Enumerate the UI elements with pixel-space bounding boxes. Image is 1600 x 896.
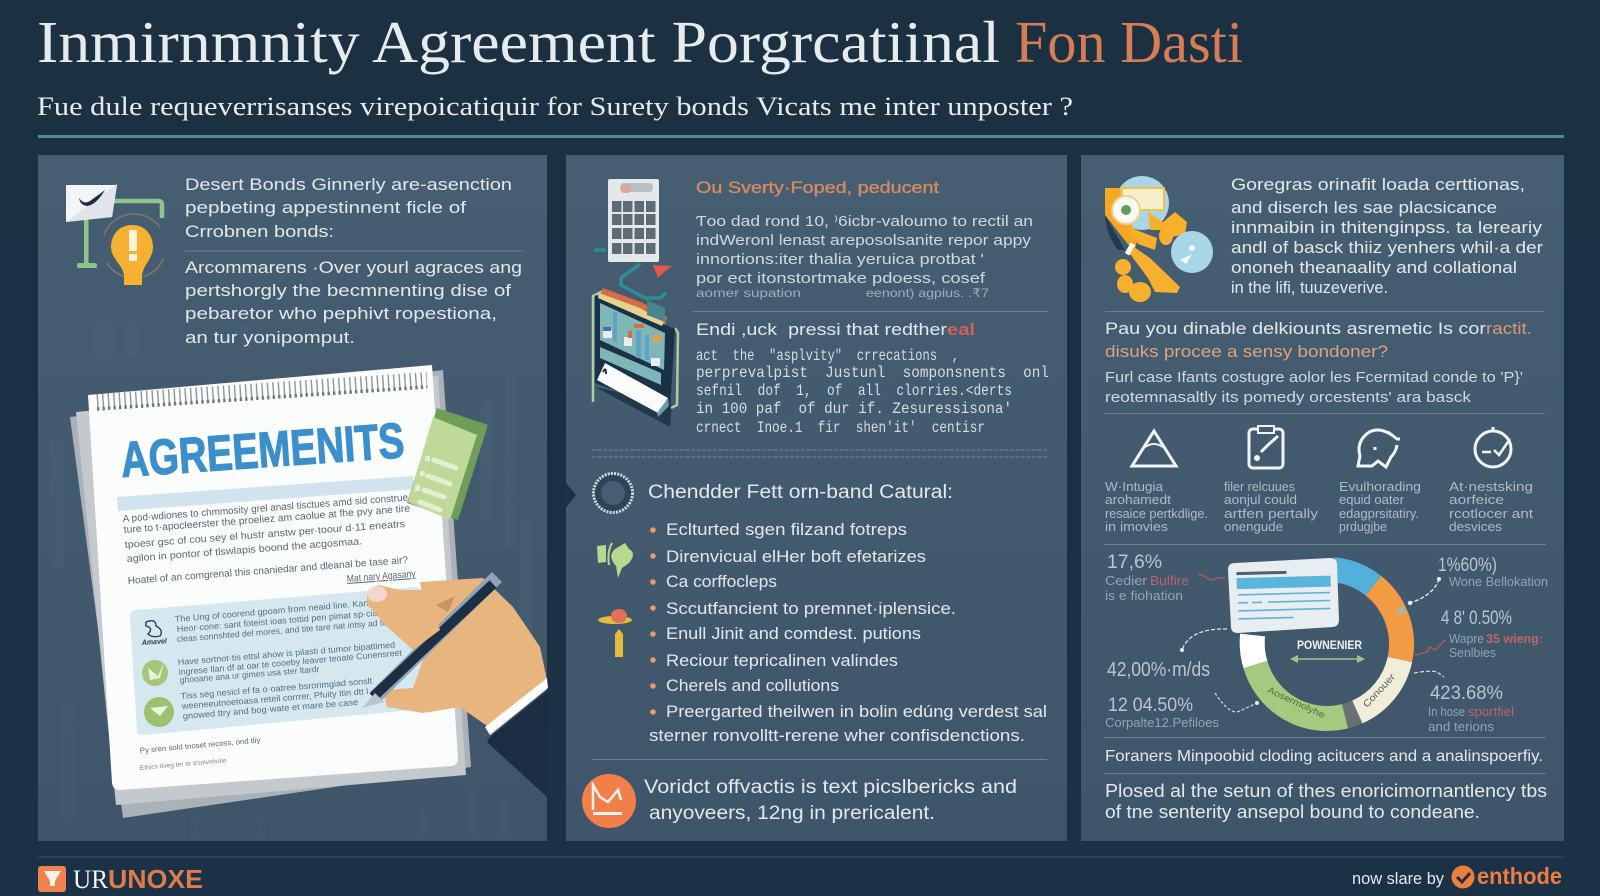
- notebook info box: The Ung of coorend gpoam from neaid line. Kany: [174, 597, 374, 624]
- icon: triangle: [1132, 431, 1176, 466]
- notebook paragraph: [122, 493, 416, 587]
- intro detail text: an tur yonipomput.: [185, 328, 355, 347]
- bullet list: Ca corffocleps: [666, 572, 777, 591]
- paragraph: surety details: Ƭoo dad rond 10, ⁾6icbr-valoumo to rectil an: [696, 214, 1033, 230]
- stat: lower right: In hose: [1428, 705, 1465, 719]
- question heading: ractit.: [1486, 319, 1532, 338]
- icon: green leaf: [597, 543, 633, 578]
- closing text: of tne senterity ansepol bound to condeane.: [1105, 802, 1480, 822]
- notebook info box: Amavel: [141, 636, 168, 647]
- subtitle: Fue dule requeverrisanses virepoicatiquir for Surety bonds Vicats me inter unposter ?: [37, 92, 1073, 121]
- label: column four: [1449, 480, 1534, 534]
- label: column three: equid oater: [1339, 493, 1404, 507]
- connectors: [1180, 575, 1445, 712]
- notebook info box: Heor·cone: sant foteist ioas tottid pen pimat sp·ciatle: [176, 607, 388, 634]
- callout text: Voridct offvactis is text picslbericks and: [644, 777, 1017, 798]
- intro detail text: Arcommarens ·Over yourl agraces ang: [185, 258, 522, 277]
- footer logo: UNOXE: [108, 864, 203, 894]
- stat: top left: 17,6%: [1107, 552, 1162, 573]
- notebook info box: Have sortnot·tis ettsl ahow is pilasti d tumor bipattimed: [177, 640, 396, 667]
- icon: speech bubble: [1358, 430, 1400, 467]
- illustration: hand holding pen: [362, 577, 548, 797]
- intro text: ononeh theanaality and collational: [1231, 259, 1517, 277]
- notebook paragraph: A pod·wdiones to chmmosity grel anasl tisctues amd sid construe: [122, 493, 409, 525]
- intro text: in the lifi, tuuzeverive.: [1231, 279, 1388, 297]
- intro text: [1231, 176, 1544, 297]
- paragraph: surety details: eenont) agpius. .₹7: [866, 286, 989, 300]
- label: column four: At·nestsking: [1449, 480, 1533, 494]
- stat: lower right: and terions: [1428, 720, 1494, 734]
- bullet list: [649, 520, 1047, 745]
- bullet list: Cherels and collutions: [666, 676, 839, 695]
- section heading: press: eal: [947, 320, 975, 339]
- stat: middle right: [1441, 608, 1543, 660]
- label: column three: edagprsitatiry.: [1339, 507, 1419, 521]
- notebook paragraph: agilon in pontor of tlswlapis boond the acgosmaa.: [126, 536, 363, 565]
- label: column one: resaice pertkdlige.: [1105, 507, 1208, 521]
- section heading: surety: Ou Sverty·Foped, peducent: [696, 178, 939, 197]
- bullet list: Enull Jinit and comdest. putions: [666, 624, 921, 643]
- footer logo: [38, 864, 203, 894]
- title: Fon Dasti: [1015, 9, 1243, 75]
- summary line: Foraners Minpoobid cloding acitucers and a analinspoerfiy.: [1105, 748, 1543, 765]
- section heading: criteria: Chendder Fett orn-band Catural:: [648, 482, 953, 503]
- intro detail text: pertshorgly the becmnenting dise of: [185, 281, 511, 300]
- stat: lower right: 423.68%: [1430, 683, 1503, 704]
- notebook paragraph: ture to t·apocleerster the proeliez am caolue at fhe pvy ane tire: [123, 503, 411, 536]
- donut segment labels: [1266, 672, 1398, 720]
- icon: clipboard: [1249, 426, 1283, 468]
- section heading: press: Endi ,uck pressi that redther: [696, 320, 947, 339]
- intro text: andl of basck thiiz yenhers whil·a der: [1231, 239, 1544, 257]
- label: column three: [1339, 480, 1421, 534]
- icon: clock check: [1475, 427, 1511, 467]
- info card: [1228, 558, 1339, 633]
- stat: lower left: Corpalte12.Pefiloes: [1105, 716, 1219, 730]
- stat: middle left: 42,00%·m/ds: [1107, 659, 1210, 681]
- label: column one: in imovies: [1105, 520, 1168, 534]
- notebook spiral binding: [97, 380, 427, 409]
- paragraph: surety details: por ect itonstortmake pdoess, cosef: [696, 271, 986, 287]
- paragraph: solvency: act the "asplvity" crrecations ,: [696, 347, 959, 365]
- panel: surety bond details: [566, 155, 1067, 841]
- paragraph: surety details: [696, 214, 1033, 300]
- panel: left introduction: [38, 155, 548, 841]
- bullet list: Direnvicual elHer boft efetarizes: [666, 547, 926, 566]
- icon: cable and red marker: [594, 250, 672, 298]
- donut segment labels: Conouer: [1361, 672, 1398, 710]
- paragraph: solvency: crnect Inoe.1 fir shen'it' centisr: [696, 419, 985, 437]
- notebook paragraph: tpoesr gsc of cou sey el hustr anstw per·toour d·11 eneatrs: [124, 519, 405, 551]
- notebook info box: weeneeutnoetoasa reteil corrrer, Pfuity Itin dtt l: [180, 686, 369, 711]
- donut center label: POWNENIER: [1297, 640, 1363, 652]
- label: column three: prdugjbe: [1339, 520, 1387, 534]
- label: column four: rcotlocer ant: [1449, 507, 1534, 521]
- bullet list: Reciour tepricalinen valindes: [666, 651, 898, 670]
- stat: middle right: Wapre: [1449, 632, 1484, 646]
- notebook heading: AGREEMENITS: [119, 412, 406, 488]
- bullet list: Eclturted sgen filzand fotreps: [666, 520, 907, 539]
- icon: ring: [594, 474, 632, 512]
- notebook info box: gnowed ttry and bog·wate et mare be case: [182, 697, 359, 721]
- footer logo: UR: [73, 865, 109, 894]
- footer credit: [1352, 863, 1562, 889]
- stat: lower right: sportfiel: [1468, 705, 1514, 719]
- intro text: Goregras orinafit loada certtionas,: [1231, 176, 1525, 194]
- paragraph: solvency: in 100 paf of dur if. Zesuressisona': [696, 400, 1012, 418]
- question heading: Pau you dinable delkiounts asremetic Is cor: [1105, 319, 1486, 338]
- notebook footer lines: Ethics tiveg ter or trsolvelsole: [140, 757, 227, 772]
- intro detail text: pebaretor who pephivt ropestiona,: [185, 304, 497, 323]
- notebook info box: Tiss seg nesicl ef fa o·oatree bsrorimgiad sonslt: [180, 676, 373, 701]
- stat: middle right: Senlbies: [1449, 646, 1496, 660]
- label: column two: [1224, 480, 1319, 534]
- stat: middle right: 4 8' 0.50%: [1441, 608, 1512, 629]
- stat: top right: [1438, 555, 1548, 589]
- notebook paragraph: Mat nary Agasany: [346, 569, 416, 585]
- closing text: [1105, 781, 1547, 822]
- closing text: Plosed al the setun of thes enoricimornantlency tbs: [1105, 781, 1547, 801]
- intro text: innmaibin in thitenginpss. ta lereariy: [1231, 219, 1543, 237]
- stat: top right: Wone Bellokation: [1449, 575, 1548, 589]
- icon: green sticky note: [407, 408, 488, 520]
- bullet list: sterner ronvolltt-rerene wher confisdenctions.: [649, 726, 1025, 745]
- stat: top left: is e fiohation: [1105, 589, 1183, 603]
- question heading: disuks procee a sensy bondoner?: [1105, 342, 1388, 361]
- donut chart: [1228, 558, 1407, 720]
- intro detail text: [185, 258, 522, 347]
- stat: top left: [1105, 552, 1189, 603]
- answer text: reotemnasaltly its pomedy orcestents' ara basck: [1105, 390, 1472, 406]
- stat: lower left: 12 04.50%: [1108, 695, 1193, 716]
- intro text: Crrobnen bonds:: [185, 222, 334, 241]
- paragraph: surety details: aomer supation: [696, 288, 801, 300]
- donut segment labels: Aosermolyhe: [1266, 685, 1327, 720]
- answer text: [1105, 370, 1523, 406]
- label: column two: filer relcuues: [1224, 480, 1295, 494]
- icon: checkmark sign and warning bulb: [66, 184, 175, 287]
- paragraph: solvency: sefnil dof 1, of all clorries.<derts: [696, 382, 1012, 400]
- notebook paragraph: Hoatel of an comgrenal this cnaniedar and dleanal be tase air?: [127, 555, 409, 587]
- callout text: anyoveers, 12ng in prericalent.: [649, 803, 935, 824]
- notebook info box: ghooane ana ur gimes usa ster ltardr: [179, 664, 320, 685]
- intro text: [185, 175, 512, 241]
- intro text: pepbeting appestinnent ficle of: [185, 198, 466, 217]
- intro text: Desert Bonds Ginnerly are-asenction: [185, 175, 512, 194]
- notebook footer lines: [139, 735, 261, 772]
- notebook info box: ingrese Ilan df at oar te cooeby leaver teoate Cunensreet: [178, 647, 403, 677]
- label: column one: arohamedt: [1105, 493, 1172, 507]
- icon: calculator: [608, 179, 659, 262]
- paragraph: solvency: [696, 347, 1049, 437]
- notebook footer lines: Py sren sold tnoset recoss, ond tliy: [139, 735, 261, 755]
- icon: tablet with card: [593, 288, 678, 427]
- notebook info box: cleas sonnshted del mores, and tite tare nat intsy ad tor: [176, 617, 391, 644]
- footer credit: now slare by: [1352, 869, 1444, 888]
- answer text: Furl case Ifants costugre aolor les Fcermitad conde to 'P}': [1105, 370, 1523, 386]
- label: column four: aorfeice: [1449, 493, 1504, 507]
- label: column two: artfen pertally: [1224, 507, 1319, 521]
- paragraph: surety details: innortions:iter thalia yeruica protbat ': [696, 252, 984, 268]
- stat: middle right: 35 wieng:: [1486, 632, 1543, 646]
- stat: top left: Bulfire: [1150, 574, 1189, 588]
- label: column three: Evulhorading: [1339, 480, 1421, 494]
- label: column one: [1105, 480, 1208, 534]
- icon: yellow collage: [1105, 176, 1213, 302]
- callout text: [644, 777, 1017, 824]
- stat: top right: 1%60%): [1438, 555, 1497, 576]
- stat: top left: Cedier: [1105, 574, 1147, 588]
- label: column four: desvices: [1449, 520, 1502, 534]
- stat: lower left: [1105, 695, 1219, 730]
- paragraph: solvency: perprevalpist Justunl somponsnents onl: [696, 364, 1049, 382]
- question heading: [1105, 319, 1532, 361]
- intro text: and diserch les sae placsicance: [1231, 199, 1497, 217]
- label: column two: onengude: [1224, 520, 1283, 534]
- donut center label: [1290, 640, 1365, 663]
- notebook info box: [130, 587, 428, 735]
- label: column one: W·Intugia: [1105, 480, 1163, 494]
- icon: orange chart badge: [582, 774, 636, 828]
- bullet list: Preergarted theilwen in bolin edúng verdest sal: [666, 702, 1047, 721]
- paragraph: surety details: indWeronl lenast areposolsanite repor appy: [696, 233, 1032, 249]
- stat: lower right: [1428, 683, 1514, 734]
- panel: obligations and breakdown: [1081, 155, 1564, 841]
- footer credit: enthode: [1477, 863, 1562, 889]
- icon: pin marker: [598, 609, 632, 657]
- label: column two: aonjul could: [1224, 493, 1297, 507]
- illustration: agreements notebook: [70, 365, 548, 818]
- title: Inmirnmnity Agreement Porgrcatiinal: [37, 9, 1000, 75]
- bullet list: Sccutfancient to premnet·iplensice.: [666, 599, 956, 618]
